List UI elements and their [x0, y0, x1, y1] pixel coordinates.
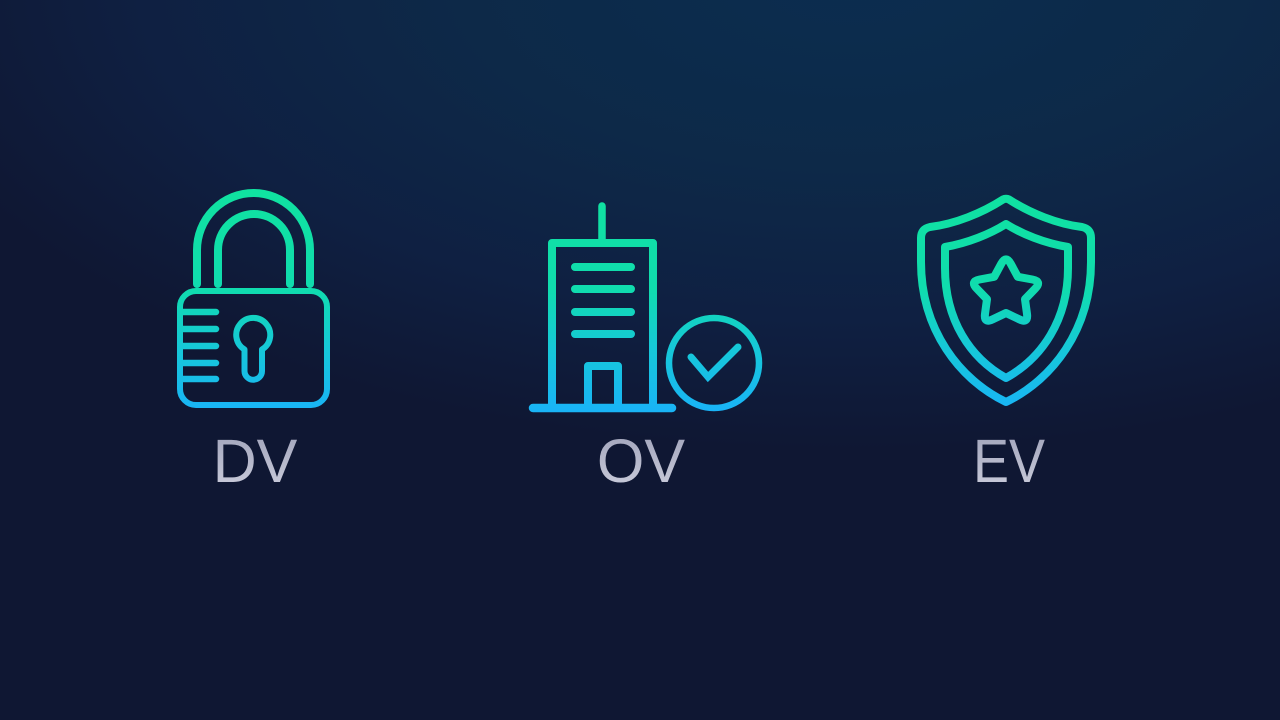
shield inner outline — [945, 224, 1068, 378]
verified check mark — [691, 347, 738, 377]
icon: padlock (DV) — [180, 193, 327, 405]
icon: office building (OV) — [533, 206, 759, 408]
building door — [588, 366, 618, 406]
building outline — [552, 243, 653, 406]
padlock keyhole — [236, 318, 270, 380]
building antenna — [598, 206, 606, 240]
padlock outer shackle — [197, 193, 310, 284]
label: EV: EV — [973, 427, 1045, 495]
padlock inner shackle — [218, 214, 290, 284]
shield star — [974, 259, 1038, 321]
label: DV: DV — [213, 427, 298, 495]
padlock body — [180, 291, 327, 405]
label: OV: OV — [597, 427, 685, 495]
padlock texture lines — [182, 312, 216, 379]
building base — [533, 404, 672, 412]
verified badge circle — [669, 318, 759, 408]
icon: shield with star (EV) — [921, 199, 1091, 402]
building floor lines — [575, 267, 631, 334]
shield outer outline — [921, 199, 1091, 402]
